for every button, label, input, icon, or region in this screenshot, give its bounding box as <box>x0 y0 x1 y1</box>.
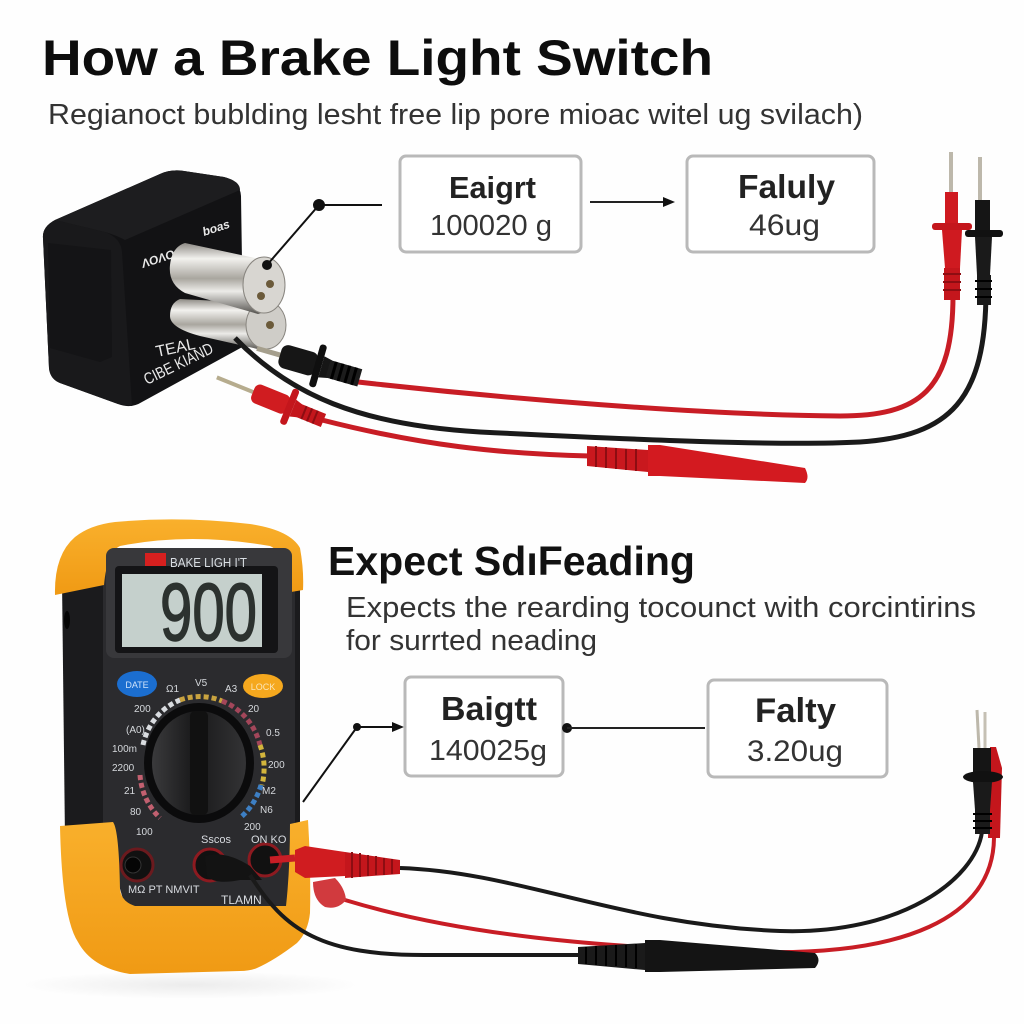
subtitle: Regianoct bubldіng lesht free lip pore mioac witel ug svilach) <box>48 99 863 131</box>
meter red plug <box>270 846 400 878</box>
switch top face <box>55 170 240 240</box>
dial labels: 200 <box>134 704 151 715</box>
dial labels: A3 <box>225 684 238 695</box>
dial labels: 100m <box>112 744 137 755</box>
dial labels: V5 <box>195 678 208 689</box>
orange button: LOCK <box>251 682 275 692</box>
box: faulty reading: 46ug <box>749 209 820 242</box>
lower upright probes <box>963 710 1003 838</box>
second red wire <box>322 420 590 456</box>
box: good reading two: 140025g <box>429 735 547 767</box>
switch housing <box>43 170 246 406</box>
jack labels: ON KO <box>251 834 287 846</box>
switch labels: ΛΟΛΟ <box>139 247 177 271</box>
panel: brake light switch <box>43 170 382 406</box>
dial labels <box>112 678 285 838</box>
meter leader arrow <box>303 722 404 802</box>
dial labels: 200 <box>268 760 285 771</box>
switch labels: boas <box>201 217 232 239</box>
jack labels: TLAMN <box>221 893 262 907</box>
dial labels: 2200 <box>112 763 135 774</box>
box: good reading <box>400 156 581 252</box>
red long probe <box>587 445 808 483</box>
jack labels: Sscos <box>201 834 231 846</box>
section description: Expects the rearding tocounct with corcintirins <box>346 592 976 624</box>
wires and probes: top <box>210 152 1003 483</box>
dial labels: 20 <box>248 704 260 715</box>
blue button: DATE <box>125 680 149 690</box>
dial labels: (A0) <box>126 725 145 736</box>
dial labels: N6 <box>260 805 273 816</box>
lower metal cylinder <box>170 299 286 350</box>
multimeter <box>55 519 580 974</box>
box: faulty reading two <box>708 680 887 777</box>
long black probe <box>578 940 818 972</box>
red clip probe <box>210 360 331 438</box>
box: good reading two: Baigtt <box>441 690 537 727</box>
meter face <box>103 550 295 906</box>
dial labels: 80 <box>130 807 142 818</box>
connector between boxes <box>562 723 705 733</box>
box: good reading: Eaigrt <box>449 170 536 205</box>
dial labels: 21 <box>124 786 136 797</box>
jack labels: MΩ PT NMVIT <box>128 884 200 896</box>
second red clip <box>313 878 346 908</box>
black wire <box>235 290 986 443</box>
dial labels: Ω1 <box>166 684 179 695</box>
upper metal cylinder <box>170 243 285 314</box>
LCD reading: 900 <box>160 567 257 658</box>
switch labels <box>139 217 232 389</box>
lower black wire <box>400 832 982 931</box>
lower black probe <box>963 710 1003 834</box>
box: faulty reading two: Falty <box>755 692 836 730</box>
meter model label: BAKE LIGH I'T <box>170 555 247 570</box>
meter side port <box>64 611 70 629</box>
display bezel <box>115 566 278 653</box>
title: How a Brake Light Switch <box>42 30 713 86</box>
meter black plug <box>205 854 262 882</box>
switch labels: CIBE KIAND <box>141 340 216 389</box>
switch front recess <box>48 243 112 362</box>
box: good reading two <box>405 677 563 776</box>
blue button <box>117 671 157 697</box>
upright black probe <box>965 157 1003 305</box>
section description <box>346 592 976 657</box>
black clip probe <box>251 327 366 399</box>
top bumper <box>55 519 303 595</box>
dial labels: 0.5 <box>266 728 280 739</box>
red wire <box>358 295 953 416</box>
orange button <box>243 674 283 698</box>
meter black wire <box>250 875 580 955</box>
bottom bumper <box>60 820 310 974</box>
section description: for surrted neading <box>346 625 597 657</box>
dial labels: M2 <box>262 786 276 797</box>
switch front face <box>43 220 132 406</box>
upright red probe <box>932 152 972 300</box>
box: faulty reading: Faluly <box>738 168 836 205</box>
readings row two <box>303 677 887 802</box>
lower red wire <box>345 838 994 952</box>
dial scale arcs <box>140 697 264 818</box>
lower red probe <box>985 712 1002 838</box>
box: faulty reading <box>687 156 874 252</box>
box: good reading: 100020 g <box>430 210 552 242</box>
dial labels: 200 <box>244 822 261 833</box>
jack labels <box>128 834 287 907</box>
LCD screen <box>122 574 262 647</box>
callout leader <box>263 200 382 269</box>
display frame <box>106 548 292 658</box>
dial labels: 100 <box>136 827 153 838</box>
meter body <box>62 580 300 840</box>
switch labels: TEAL <box>154 336 197 361</box>
readings row one <box>400 156 874 252</box>
arrow between boxes <box>590 197 675 207</box>
ground shadow <box>20 971 360 999</box>
input jacks <box>121 844 281 881</box>
red indicator <box>145 553 166 566</box>
section heading: Expect SdıFeading <box>328 538 695 584</box>
box: faulty reading two: 3.20ug <box>747 735 843 768</box>
rotary knob <box>144 703 254 823</box>
wires behind meter <box>345 832 994 952</box>
